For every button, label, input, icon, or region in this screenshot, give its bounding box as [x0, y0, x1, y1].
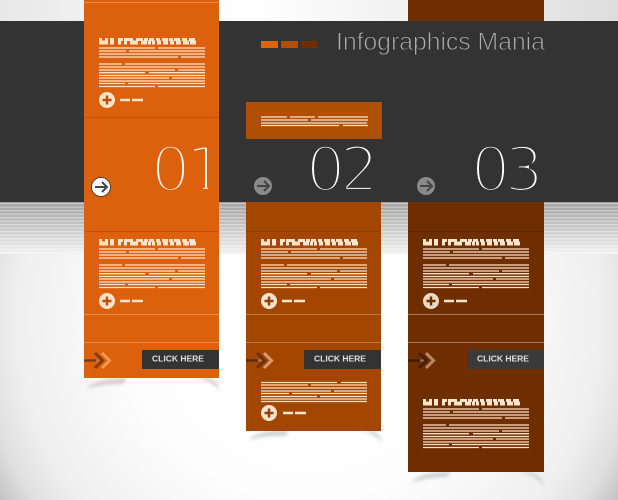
number 02: 02 — [306, 133, 379, 206]
panel 1 click here button: CLICK HERE — [152, 354, 204, 364]
panel 1 double arrow — [84, 353, 110, 368]
panel 2 plus button — [261, 293, 305, 309]
panel 2 lower text lines — [261, 382, 367, 402]
arrow icon panel 2 — [254, 177, 272, 195]
panel 1 number: 01 — [151, 133, 225, 206]
panel 2 — [246, 202, 381, 431]
panel 3 text block lower — [423, 400, 529, 448]
panel 2 click here button: CLICK HERE — [314, 354, 366, 364]
panel 1 plus button bottom — [99, 293, 143, 309]
panel 3 plus button — [423, 293, 467, 309]
panel 3 — [408, 202, 544, 472]
panel 1 arrow icon — [92, 178, 110, 196]
panel shadows — [86, 378, 544, 486]
panel 3 text block upper — [423, 240, 529, 288]
panel 3 click here button — [467, 350, 544, 369]
panel 3 click here button: CLICK HERE — [477, 354, 529, 364]
panel 2 click here button — [304, 350, 381, 369]
panel 3 double arrow — [408, 353, 434, 368]
panel 2 text block — [261, 240, 367, 288]
title: Infographics Mania — [336, 28, 545, 56]
panel 2 lower plus button — [261, 405, 306, 421]
legend colour chips — [261, 41, 317, 48]
panel 2 top tab — [246, 102, 382, 139]
panel 1 click here button — [142, 350, 219, 369]
number 03: 03 — [471, 133, 544, 206]
arrow icon panel 3 — [417, 177, 435, 195]
panel 3 top tab — [408, 0, 544, 21]
panel 1 — [84, 0, 225, 378]
panel 2 double arrow — [246, 353, 272, 368]
panel 1 text block top — [99, 40, 205, 86]
panel 1 text block bottom — [99, 240, 205, 288]
dark horizontal band — [0, 21, 618, 202]
panel 1 plus button top — [99, 92, 143, 108]
